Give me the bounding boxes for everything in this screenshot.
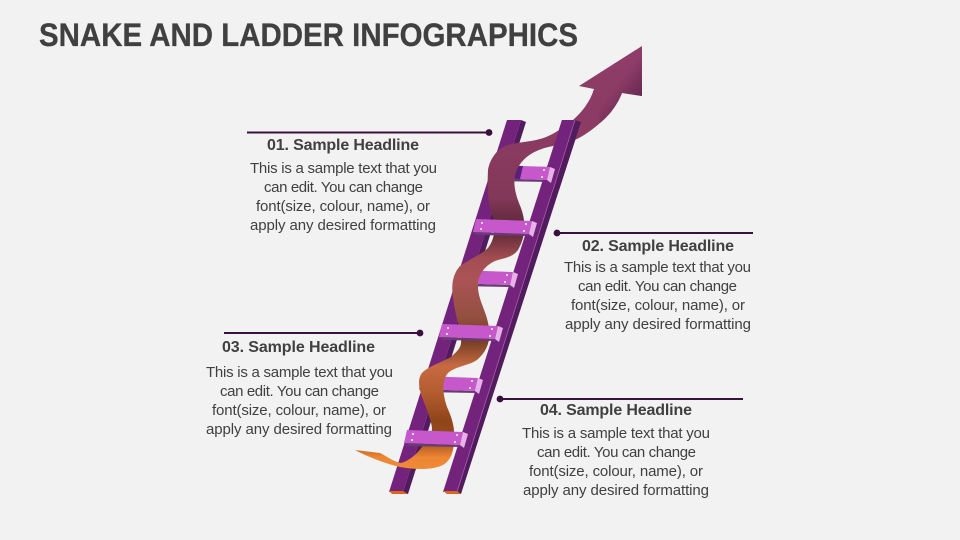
callout 02 xyxy=(554,230,753,333)
callout 03: font(size, colour, name), or xyxy=(212,402,386,419)
ladder rung 4 xyxy=(439,324,503,342)
ladder: right rail xyxy=(443,120,581,494)
callout 01: font(size, colour, name), or xyxy=(256,198,430,215)
callout 03: This is a sample text that you xyxy=(206,364,393,381)
snake arrow xyxy=(355,46,642,469)
callout 03: can edit. You can change xyxy=(220,383,379,400)
ladder: left rail xyxy=(389,120,526,494)
ladder rung 6 xyxy=(404,430,468,448)
callout 02: apply any desired formatting xyxy=(565,316,751,333)
ladder rung 5 (behind snake) xyxy=(419,376,483,394)
ladder rung 3 (behind snake) xyxy=(454,270,518,288)
callout 04: 04. Sample Headline xyxy=(540,402,692,419)
ladder: right rail top overlapping snake xyxy=(540,120,581,190)
callout 01 xyxy=(247,129,492,234)
callout 04: font(size, colour, name), or xyxy=(529,463,703,480)
callout 02: font(size, colour, name), or xyxy=(571,297,745,314)
callout 02: 02. Sample Headline xyxy=(582,238,734,255)
callout 04: apply any desired formatting xyxy=(523,482,709,499)
callout 01: This is a sample text that you xyxy=(250,160,437,177)
title: SNAKE AND LADDER INFOGRAPHICS xyxy=(39,17,578,53)
callout 02: This is a sample text that you xyxy=(564,259,751,276)
ladder rung 1 end cap xyxy=(530,166,555,183)
callout 01: apply any desired formatting xyxy=(250,217,436,234)
callout 01: 01. Sample Headline xyxy=(267,137,419,154)
callout 04: This is a sample text that you xyxy=(522,425,710,442)
callout 01: can edit. You can change xyxy=(264,179,423,196)
callout 03 xyxy=(206,330,423,438)
ladder rung 1 (behind snake) xyxy=(491,165,555,183)
callout 03: 03. Sample Headline xyxy=(222,339,375,356)
callout 04 xyxy=(497,396,743,499)
callout 04: can edit. You can change xyxy=(537,444,696,461)
ladder rung 2 xyxy=(473,219,537,237)
callout 02: can edit. You can change xyxy=(578,278,737,295)
callout 03: apply any desired formatting xyxy=(206,421,392,438)
